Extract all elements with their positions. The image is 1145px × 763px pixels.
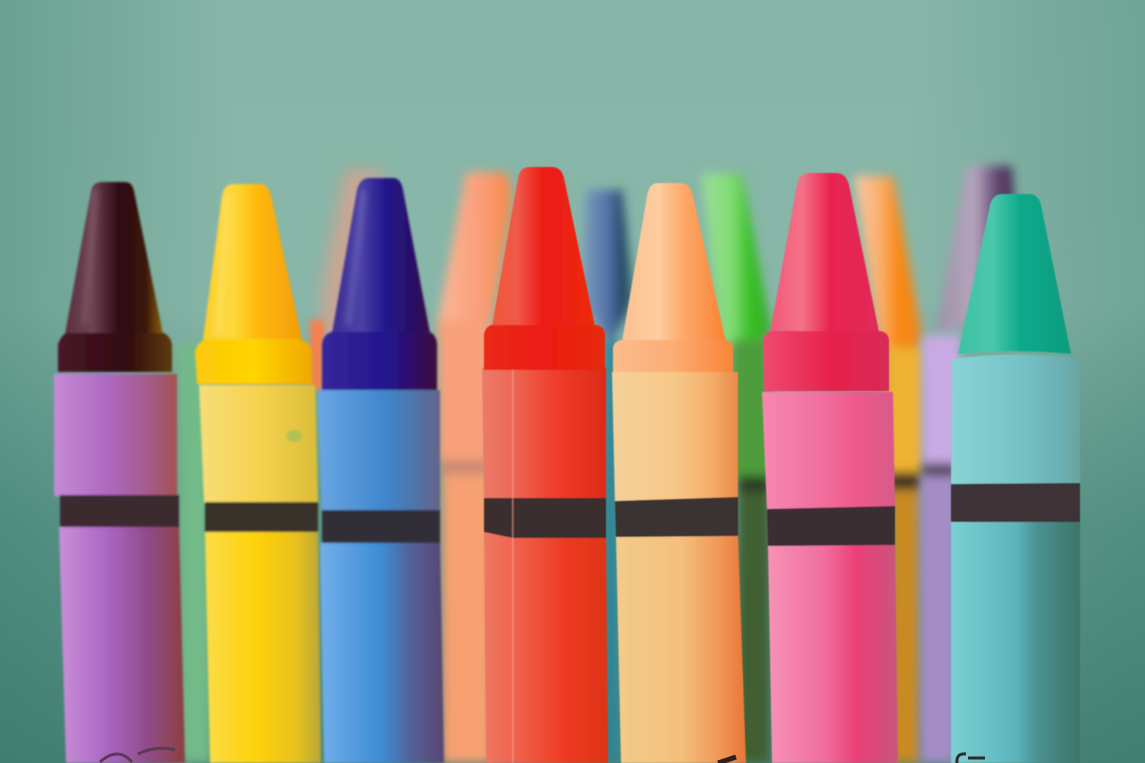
tip bbox=[332, 178, 430, 333]
crayon: yellow bbox=[195, 184, 321, 763]
crayon: teal bbox=[951, 194, 1080, 763]
crayon: blue bbox=[318, 178, 444, 763]
band bbox=[951, 483, 1080, 522]
blurred crayon: salmon behind blue bbox=[310, 170, 392, 390]
wrapper bbox=[318, 390, 440, 511]
blurred crayon: purple right bbox=[920, 166, 1014, 763]
blurred crayon: green bbox=[702, 174, 772, 763]
wrapper bbox=[54, 374, 177, 496]
collar bbox=[195, 339, 312, 384]
tip bbox=[622, 183, 726, 342]
blurred background crayons bbox=[178, 166, 1014, 763]
wrapper bbox=[762, 392, 895, 511]
band bbox=[322, 510, 440, 543]
collar bbox=[484, 325, 605, 370]
wrapper print marks at bottom edge bbox=[100, 748, 985, 763]
collar bbox=[58, 333, 172, 372]
blurred crayon: orange bbox=[436, 172, 511, 763]
band bbox=[484, 498, 606, 538]
tip bbox=[770, 173, 879, 332]
band bbox=[60, 495, 179, 527]
crayon: purple bbox=[54, 182, 185, 763]
crayon: light orange bbox=[612, 183, 746, 763]
tip bbox=[958, 194, 1071, 354]
tip bbox=[492, 167, 595, 326]
blurred crayon: orange right bbox=[854, 176, 923, 763]
wrapper bbox=[612, 372, 738, 503]
band bbox=[767, 506, 895, 546]
crayon: pink bbox=[762, 173, 898, 763]
collar bbox=[322, 332, 437, 390]
wrapper bbox=[199, 385, 318, 503]
crayon: red bbox=[482, 167, 608, 763]
band bbox=[205, 502, 318, 532]
seam bbox=[512, 368, 514, 763]
wrapper bbox=[951, 354, 1080, 486]
blurred crayon: blue bbox=[582, 190, 634, 763]
band bbox=[615, 497, 738, 537]
tip bbox=[65, 182, 163, 334]
collar bbox=[613, 340, 733, 372]
collar bbox=[763, 331, 889, 391]
tip bbox=[203, 184, 302, 340]
blurred crayon: green left bbox=[178, 345, 212, 763]
wrapper bbox=[482, 367, 606, 499]
